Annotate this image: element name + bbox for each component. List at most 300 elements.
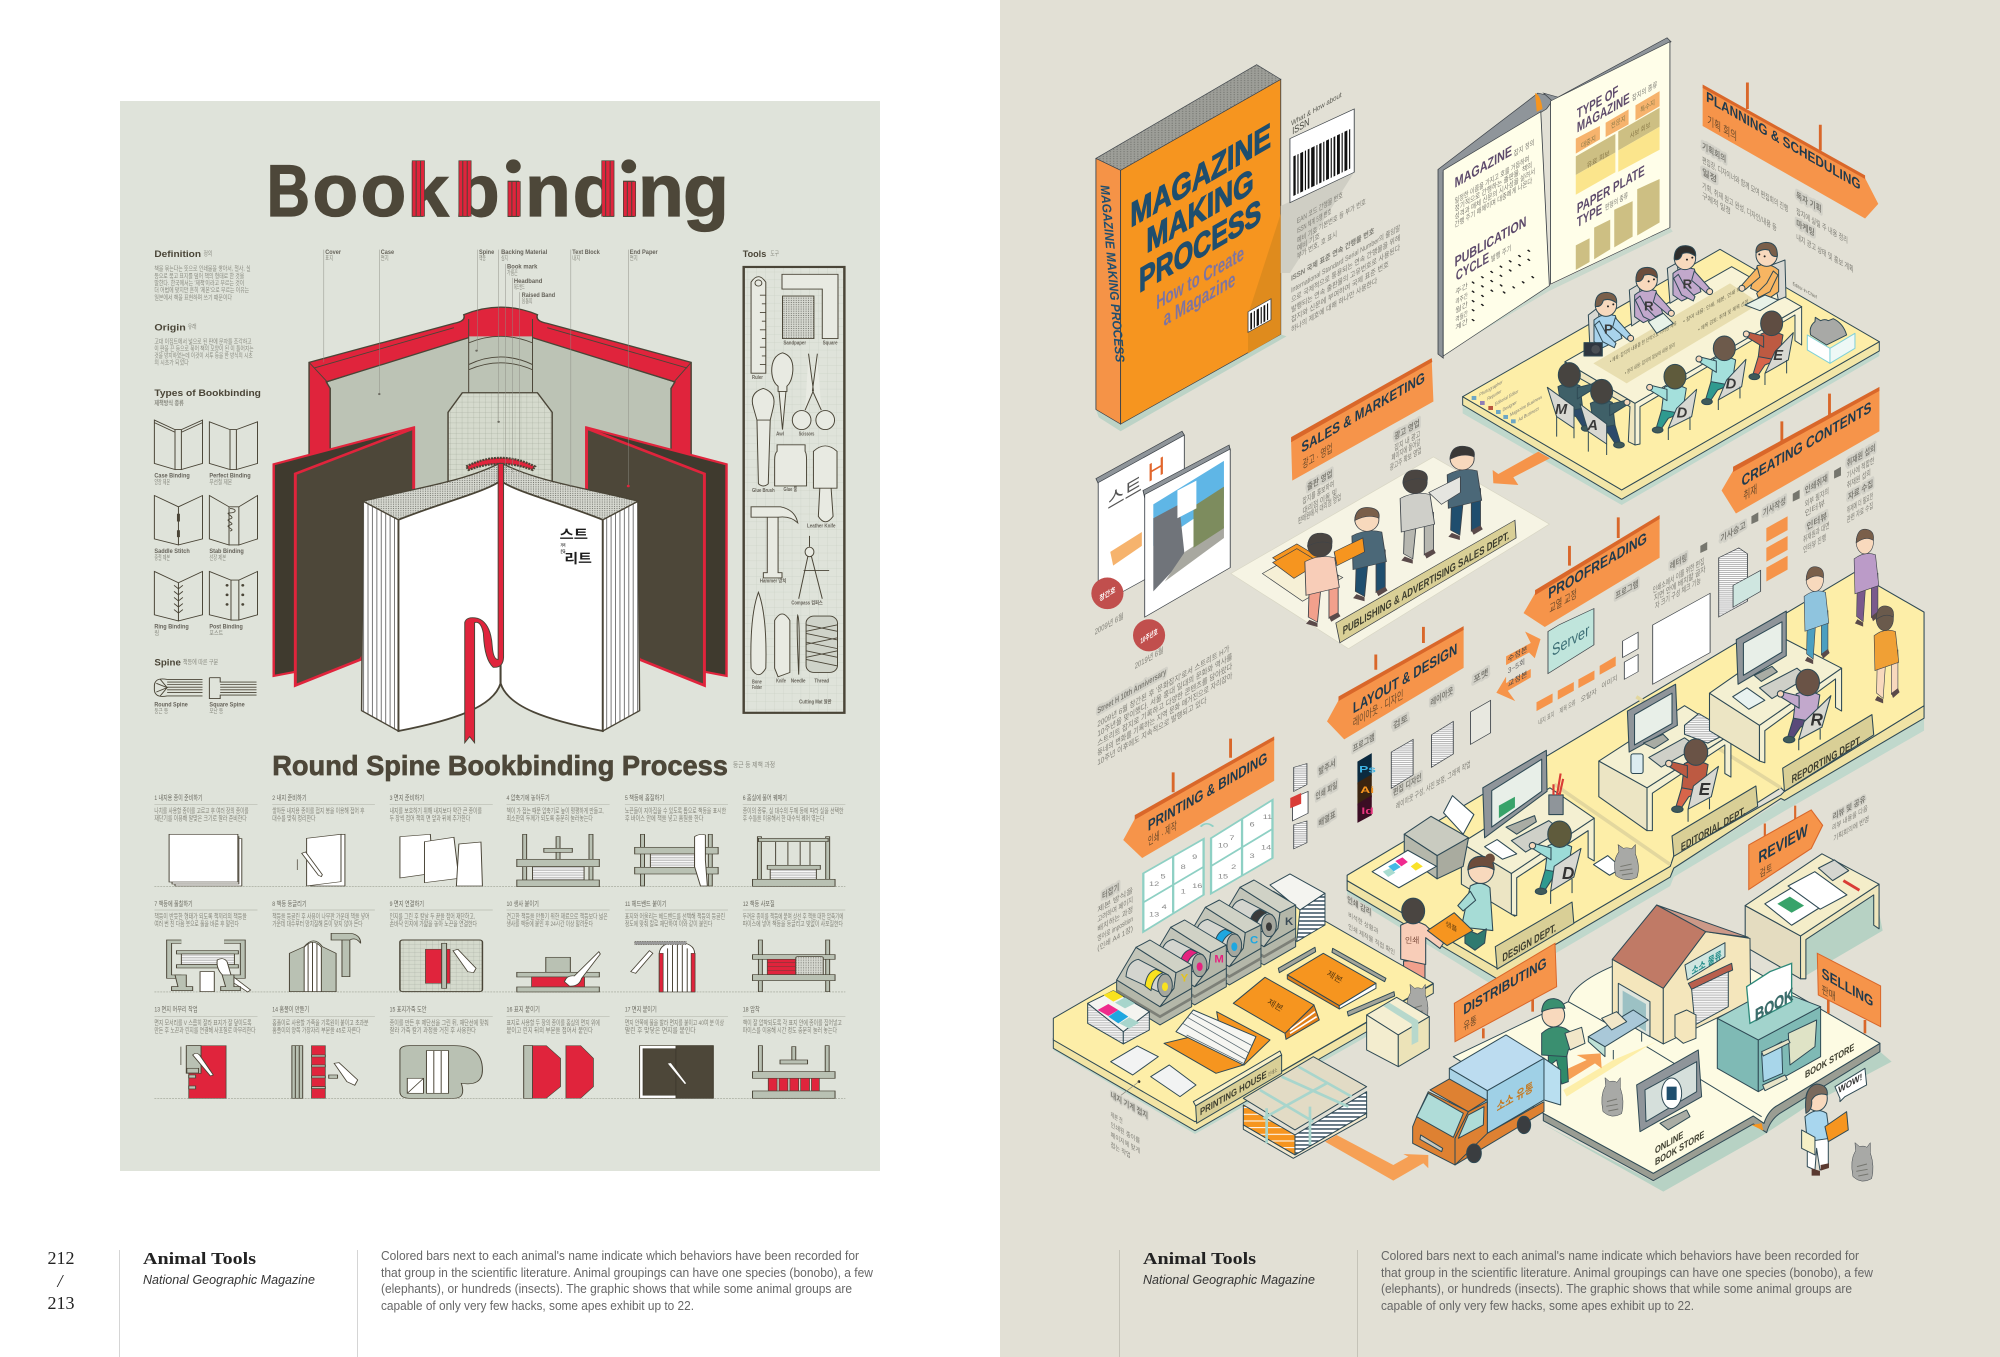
icon: scissors [805,354,821,410]
printer [1372,796,1474,888]
cover subtitle [1156,241,1244,331]
step text row 3: 17 면지 붙이기 [625,1005,657,1013]
scissors handles [792,411,835,430]
caption left [143,1248,874,1313]
icon: perfect binding: Perfect Binding [209,473,251,479]
imposition sheets: 4 [1162,903,1168,911]
imposition sheets: 8 [1181,863,1186,870]
icon: saddle stitch: 중철 제본 [154,553,170,562]
chair with letter [1688,766,1718,822]
callouts: book parts: 헤드밴드 [514,283,525,291]
icon step 7: clamps and glue [169,942,251,992]
caption right [1143,1248,1874,1313]
icon step 8: rounding with hammer [289,933,361,992]
ISSN description: ISSN 국제 표준 연속 간행물 번호 [1291,225,1375,283]
store labels: BOOK STORE [1655,1129,1704,1168]
cover: first issue: H [1148,450,1165,488]
step text row 3: 홈풀이의 양쪽 가장자리 부분을 45로 자른다 [272,1026,361,1034]
keyboard [1511,821,1561,852]
floor: planning meeting room [1463,242,1879,505]
floor: sales department: PUBLISHING & ADVERTISING SALES DEPT. [1343,529,1509,638]
tool captions: Glue Brush [752,488,775,494]
sign: review [1749,806,1823,890]
tool captions: Hammer 망치 [760,577,786,585]
paper plate type: 판형의 종류 [1605,190,1628,212]
open magazine spread [1438,38,1673,358]
truck [1413,1035,1561,1165]
keyboard [1649,738,1697,767]
warehouse sign: 소소 물류 [1692,949,1722,978]
right end papers [587,427,727,685]
bookmark ribbon [465,463,504,743]
icon: round spine: Round Spine [154,702,188,709]
text block: sales notes: 광고주 확보 영업 [1390,444,1421,473]
imposition sheets: 1 [1181,888,1186,895]
store labels: BOOK STORE [1805,1042,1854,1081]
icon: thread [806,616,837,672]
proofreading stage notes: 오탈자 [1581,686,1597,704]
back team chairs with letters: E [1773,348,1784,364]
sign: planning and scheduling: 기획 회의 [1707,113,1737,144]
tool captions: Folder [752,685,762,691]
ISSN numbered notes: 예비 기호 [1297,231,1320,253]
step text row 1: 3 면지 준비하기 [390,794,424,802]
sign: proofreading [1524,515,1660,627]
text block: binding note: 인쇄된 종이를 [1111,1120,1140,1146]
conveyor belt [1588,1010,1648,1059]
imposition sheets: 16 [1192,882,1202,889]
imposition sheets: 13 [1149,911,1159,918]
text block: content flow notes: 인터뷰 [1807,511,1828,532]
proofreading server area: 교정본 [1508,668,1527,689]
sign: distributing: 유통 [1463,1014,1477,1033]
icon: post binding [209,571,258,637]
backing mesh [448,393,552,482]
store labels: ONLINE [1655,1129,1683,1157]
white pages [398,482,603,731]
callouts: book parts: 책등 [479,253,486,262]
desks and people, department floors [1372,529,1900,984]
title: Bookbinding: B [267,150,310,233]
text block: imposition note: 배치하는 과정 [1097,904,1133,934]
text block: content flow notes: 외부 필자의 [1805,485,1829,509]
text block: layout steps: 프로그램 [1353,731,1375,754]
step text row 1: 후 수틀을 이용해서 한 대수씩 꿰어 엮는다 [743,814,824,822]
caption left: that group in the scientific literature. Animal groupings can have one species (bonobo), a few [381,1265,874,1280]
page top surfaces [363,463,638,520]
front team people [1594,242,1779,348]
step text row 1: 2 내지 준비하기 [272,794,307,802]
department tag: 인쇄소 [1268,1066,1277,1078]
magazine definition: 일정한 이름을 가지고 호를 거듭하며 [1455,153,1529,206]
text block: sales notes: 페이지에 들어갈 [1392,437,1420,463]
page title mark: 거리 [561,542,566,548]
caption left: National Geographic Magazine [143,1273,315,1287]
imposition sheets [1143,800,1272,932]
text block: layout steps: 레이아웃 구성, 사진 보정, 그래픽 작업 [1396,759,1471,811]
sign: review: 검토 [1759,862,1772,881]
ISSN description: International Standard Serial Number의 줄임말 [1291,222,1401,295]
step text row 3: 말린 후 맞닿은 면지를 붙인다 [625,1026,696,1034]
step text row 1: 1 내지용 종이 준비하기 [154,794,203,802]
arrow: printing to truck [1325,1135,1428,1181]
online store monitor [1637,1050,1702,1132]
step text row 2: 정도에 맞춰 칼로 재단하여 이와 같이 붙인다 [625,920,712,928]
tablet [1733,688,1765,709]
process section [154,750,845,1098]
text block: planning notes: 구체적 일정 [1702,190,1731,216]
page title mark: 스트 [560,527,588,542]
sign: creating contents [1722,387,1879,513]
reporting team [1804,529,1900,703]
step text row 2: 책등이 반듯한 형태가 되도록 책끼리의 책등을 [154,912,247,920]
caption right: (elephants), or hundreds (insects). The graphic shows that while some animal groups are [1381,1281,1852,1296]
title: Bookbinding: ookbinding [313,150,729,232]
text block: layout steps [1316,666,1489,829]
tool captions [752,341,837,705]
callouts: book parts: Cover [325,249,341,256]
cover title: MAKING [1146,160,1254,261]
back team chairs with letters: D [1726,376,1737,392]
icon step 17: paste end paper [640,1046,713,1098]
arrow: meeting to sales [1493,452,1550,485]
text block: sales notes: 출판 영업 [1307,468,1332,492]
type of magazine: 전문지 [1611,113,1626,131]
icon step 13: trim end paper [181,1046,226,1098]
imposition sheets: 12 [1149,880,1159,888]
text block: imposition note: 고려하여 페이지 [1097,894,1133,924]
tool captions: Cutting Mat 깔판 [799,698,832,705]
caption left: capable of only very few hacks, some apes exhibit up to 22. [381,1298,694,1313]
proofreading server area: 3~5회 [1508,657,1525,675]
printing press: C unit: C [1250,934,1258,946]
team legend: Editorial Editor [1495,389,1518,408]
ISSN numbered notes: 부가 번호, 호 표시 [1297,230,1337,261]
step text row 3: 15 표지가죽 도안 [390,1005,427,1013]
sign: proofreading: 교열 교정 [1549,587,1577,616]
step text row 2: 8 책등 둥글리기 [272,900,307,908]
floor: design, editorial and reporting departments [1347,572,1924,988]
bound orange book far [1287,953,1376,1009]
ISSN description: 하나의 제호에 대해 하나만 사용한다 [1291,275,1378,334]
truck chassis [1455,1102,1544,1165]
sign: distributing [1454,943,1557,1042]
icon: awl [772,353,793,430]
small barcode [1248,299,1271,332]
text block: sales notes: 잡지를 홍보하여 [1303,478,1334,506]
table notes: • 제목: 잡지의 내용을 한 단락으로 나타낸 제목 [1610,319,1677,365]
orange task pills [1766,516,1788,581]
icon: stab binding: 선장 제본 [209,553,226,562]
department tag: reporting [1783,715,1874,791]
imposition sheets: 7 [1229,835,1235,842]
step text row 3: 만든 후 노끈과 린지를 연결해 사포질로 마무리한다 [154,1026,256,1034]
step text row 1: 4 압축기에 놓아두기 [506,794,550,802]
tool captions: Compass 컴퍼스 [791,599,823,606]
proofreading stage notes: 제목 오류 [1559,698,1576,716]
text block: definition [154,249,251,301]
tablets and camera [1584,295,1778,356]
role letters on chests: R [1644,299,1654,314]
proofreading server area: 수정본 [1508,643,1527,664]
monitor [1736,611,1786,684]
cat by reader [1852,1143,1873,1181]
icon step 5: backing press and saw [635,834,718,886]
paper plate type: PAPER PLATE [1577,163,1645,217]
type of magazine: 대중지 [1581,133,1596,150]
text block: content flow notes: 취재에 더 필요한 [1847,490,1873,515]
magazine definition: 간행 주기 매체이며 대중에게 나온다 [1455,175,1533,229]
icon: case binding [154,420,203,486]
page numbers: 212 [48,1248,74,1268]
spine column [469,319,533,393]
cover title: PROCESS [1139,191,1261,300]
tool captions: Leather Knife [807,524,836,530]
icon: saddle stitch [154,496,203,562]
icon step 1: paper stack [169,834,242,886]
tool captions: Scissors [799,432,814,438]
step text row 2: 가운데 대수부터 망치질해 톤이 맞지 않아 돈다 [272,920,363,928]
open review magazine [1765,872,1847,925]
step text row 2: 9 면지 연결하기 [390,900,424,908]
publication cycle: 계간 [1455,316,1468,332]
floor: sales department [1231,446,1549,649]
page title mark: 리트 [564,551,592,566]
callouts: book parts: Case [381,249,394,256]
printing press: C unit [1186,900,1261,985]
step text row 2: 표지와 어울리는 헤드밴드를 선택해 책등의 둥글린 [625,912,725,920]
sign: layout and design: LAYOUT & DESIGN [1353,640,1457,717]
step text row 1 [154,794,844,822]
type of magazine: 사보 회보 [1630,120,1651,140]
ISSN section [1281,90,1401,334]
callouts: book parts: Backing Material [501,249,547,256]
icon: glue jar [775,445,807,486]
icon: saddle stitch: Saddle Stitch [154,549,190,555]
text block: binding note [1111,1089,1148,1160]
poster upper section [154,150,844,743]
sign: selling: 판매 [1822,983,1836,1004]
role letters on chests: P [1604,321,1613,336]
page title mark: 문화 [561,549,566,554]
icon: adobe apps: Id [1361,806,1374,816]
magazine book [1096,65,1286,431]
team legend: Photographer [1479,379,1503,399]
step text row 3: 면지 모서리를 V 스름히 잘라 표지가 잘 덮이도록 [154,1019,252,1027]
table notes: • 참여 내용: 인쇄, 제본, 인쇄 확인 등 [1683,279,1750,325]
anniversary covers [1091,431,1230,637]
text block: layout steps: 레이아웃 [1430,684,1454,708]
sign: sales and marketing [1291,358,1433,481]
table notes: • 제목 검토: 취재 및 제목 선정 [1698,297,1748,334]
printing press: Y unit [1117,940,1192,1025]
publication cycle [1455,214,1537,332]
icon: compass [799,536,829,599]
step text row 2: 11 헤드밴드 붙이기 [625,900,667,908]
text block: definition: 등으로 묶고 표지를 덮어 책의 형태로 한 것을 [154,271,245,280]
page numbers [48,1248,74,1313]
text block: planning notes: 독자 기획 [1796,190,1821,214]
heading: spine [154,657,219,668]
page numbers: 213 [48,1293,74,1313]
parcel boxes [1675,1010,1696,1043]
text block: layout steps: 편집 디자인 [1393,771,1422,798]
icon step 15: cover leather template [400,1046,482,1098]
left end papers [274,427,414,685]
text block: content flow notes: 기사승고 [1720,519,1746,544]
imposition sheets: 15 [1218,873,1229,880]
text block: planning notes: 마케팅 [1796,217,1815,238]
lower right notes and signs [1097,609,1638,953]
floor: online store and book store [1453,967,1892,1192]
awning [1688,963,1733,989]
sign: sales and marketing: 광고 · 영업 [1303,441,1332,472]
text block: Street H anniversary: 동네의 변화를 기록하는 지역 문화 매거진으로 자리잡아 [1097,670,1232,758]
icon step 2: folding with bone [297,834,345,886]
cat [1615,845,1638,880]
paw print sheet [1593,856,1622,875]
callouts: book parts: 내지 [572,253,580,262]
icon: square spine: 모난 등 [209,706,224,715]
table notes: • 정리 내용: 잡지의 정보와 내용 정리 [1625,341,1675,377]
text block: content flow notes: 자료 수집 [1848,477,1873,502]
heading: round spine bookbinding process: 둥근 등 제책 과정 [733,761,775,769]
ISSN description: 으로 국제적으로 통용되는 연속 간행물을 위해 [1291,232,1400,305]
step text row 3: 홈풀이로 사용할 가죽을 기록원이 붙이고 초과분 [272,1019,369,1027]
text block: review notes: 기획회의에 반영 [1833,813,1869,843]
team legend: Magazine Business [1510,394,1542,418]
caption left: Colored bars next to each animal's name indicate which behaviors have been recorded for [381,1248,860,1263]
process section: 파이스에 넣어 책등을 둥글리고 빛없이 사포질한다 [743,920,843,928]
icon step 14: spine strip [292,1046,358,1098]
department tag: design: DESIGN DEPT. [1502,921,1556,965]
book store building [1717,963,1821,1092]
sign: review: REVIEW [1758,820,1808,867]
icon: case binding: Case Binding [154,473,190,479]
text block: definition: 일본에서 책을 표현하며 쓰기 때문이다 [154,293,232,301]
tool captions: Needle [791,679,806,684]
ISSN description [1291,222,1401,334]
imposition sheets: 14 [1261,844,1272,851]
publication cycle: 주간 [1455,280,1468,297]
department tag: PRINTING HOUSE [1200,1069,1267,1118]
step text row 1: 내지를 보호하기 위해 내지보다 약간 큰 종이를 [390,807,482,815]
step text row 2: 12 책등 사포질 [743,900,775,908]
text block: Street H anniversary: 2009년 6월 창간된 후 '문화잡지'로서 스트리트 H가 [1097,643,1229,729]
icon: round spine [154,679,203,715]
icon: manuscript document [1719,548,1747,617]
store labels [1655,1042,1854,1168]
paper pile [1685,714,1722,743]
colour test sheets [1088,991,1149,1044]
text block: planning notes: 잡지에 실릴 주 내용 정리 [1796,205,1848,245]
arrow: truck to warehouse [1565,1053,1602,1080]
text block: imposition note: 터잡기 [1102,881,1119,901]
monitor [1483,750,1547,838]
text block: Street H anniversary: Street H 10th Anniversary [1097,666,1167,716]
step text row 1: 나치를 사용할 종이를 고르고 후 여러 장의 종이를 [154,807,249,815]
icon: bone folder [751,592,766,675]
step text row 1: 노끈들이 지아집을 수 있도록 톱으로 책등을 표시한 [625,807,726,815]
callouts: book parts: 가름끈 [507,268,518,276]
text block: origin: 의 시초가 되었다 [154,358,189,366]
icon: print documents [1290,764,1308,849]
text block: print check note: 인쇄 제작물 직접 확인 [1348,922,1395,957]
proofreading server area: Server [1552,620,1589,660]
warehouse door [1618,983,1650,1037]
spine title: MAGAZINE MAKING PROCESS [1097,185,1126,363]
sign: selling [1817,953,1881,1033]
tool captions: Ruler [752,375,763,381]
chair with letter [1799,696,1831,750]
step text row 3 [154,1005,842,1034]
text block: content flow notes: 취재원과 대면 [1803,520,1830,545]
icon step 6: sewing frame [753,837,835,886]
proofreading server area [1496,609,1638,727]
folded sheet pointer [1118,1080,1140,1097]
step text row 1: 책이 가 접는 때문 압축기로 높이 평평하게 만들고, [506,807,604,815]
paper plate type: TYPE [1577,201,1602,231]
orange proof booklet: 샘플 [1445,920,1458,934]
panel: magazine making process [1053,38,1924,1192]
icon step 18: final press [753,1046,835,1098]
pallet of magazine bundles [1243,1057,1367,1158]
compass hinge [805,547,814,557]
tool captions: Sandpaper [783,341,807,346]
ISSN description: 잡지와 신문에 부여하여 국제 표준 번호 [1291,259,1389,324]
magazine definition: MAGAZINE [1455,143,1512,192]
shipping box with cat [1367,984,1429,1067]
heading: tools: 도구 [770,250,779,257]
chair with letter: R [1811,709,1824,729]
icon: photo card [1733,570,1761,607]
text block: proofreading notes [1615,551,1706,611]
callouts: book parts: 융통띠 [522,296,533,305]
icon: hammer [751,507,798,578]
desk: design [1372,750,1638,984]
cat near truck [1602,1078,1623,1116]
icon: cat in box [1807,317,1855,363]
callouts: book parts: 표지 [325,253,333,262]
icon step 16: cover boards [524,1046,593,1098]
step text row 1: 5 책등에 홈질하기 [625,794,664,802]
printing house area [1053,874,1433,1181]
team legend [1472,379,1542,423]
text block: sales notes [1298,417,1421,526]
text block: content flow notes: 기사작성 [1763,495,1786,518]
text block: print check note: 인쇄 감리 [1347,893,1371,917]
sign: printing and binding [1123,736,1274,858]
text block: layout steps: 인쇄 파일 [1316,779,1337,802]
reporter [1777,669,1820,743]
process section: 종이의 종류, 실 대수의 두께 등에 따라 실을 선택한 [743,807,844,815]
printing press: Y unit: Y [1181,973,1189,985]
caption right: Colored bars next to each animal's name indicate which behaviors have been recorded for [1381,1248,1860,1263]
icon step 9: cutting on mat [400,940,482,992]
icon: knife [775,614,790,677]
step text row 1: 재단기를 이용해 알맞은 크기로 잘라 준비한다 [154,814,247,822]
text block: origin: 것을 방지하였는데 이것이 서투 등을 한 방식의 시초 [154,351,253,359]
back team chairs with letters: A [1586,418,1598,434]
back team people [1558,311,1783,448]
delivery person [1542,999,1585,1084]
callouts: book parts: 면지 [630,253,638,262]
text block: content flow notes: 취재원 섭외 [1847,442,1875,469]
floor: printing house [1053,891,1433,1134]
department tag: editorial: EDITORIAL DEPT. [1681,804,1745,854]
icon step 11: headband on spine [631,941,695,992]
text block: layout steps: 배열표 [1318,808,1336,829]
